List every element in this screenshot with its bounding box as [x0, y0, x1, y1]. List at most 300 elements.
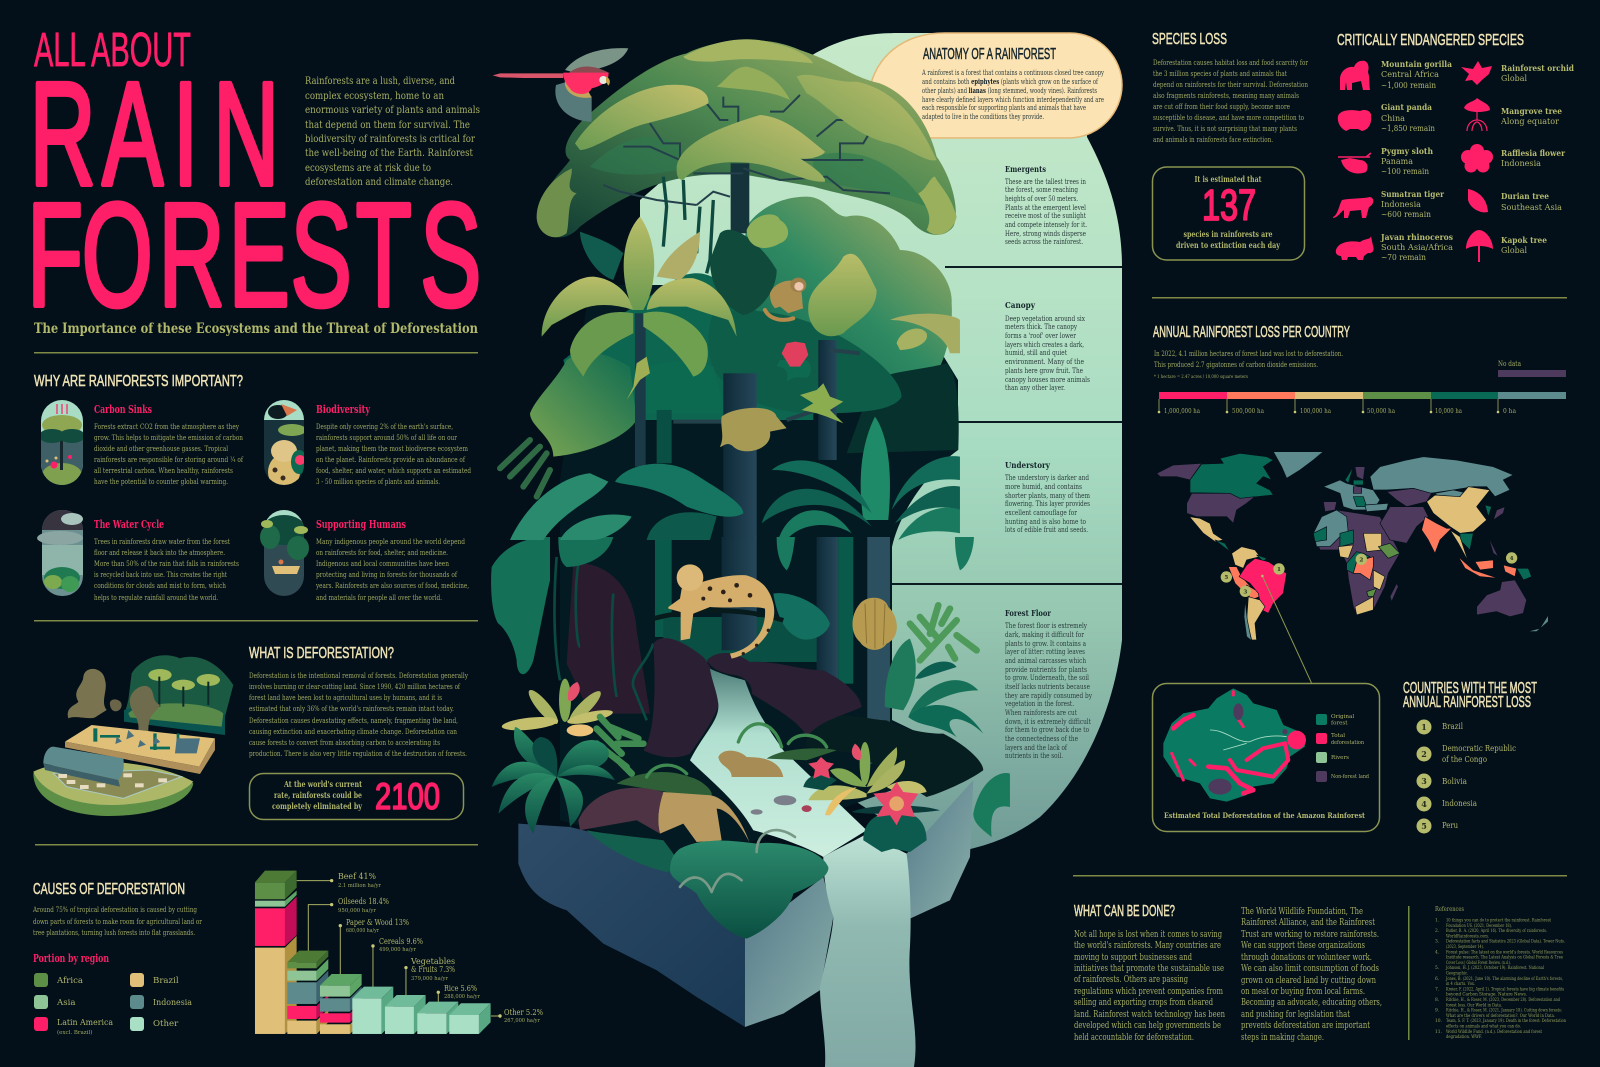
text column 1: regulations which prevent companies from: [1074, 986, 1223, 997]
bar: rice: [417, 1002, 458, 1034]
fern right of plant: [597, 717, 643, 774]
text: 3 - 50 million species of plants and animals.: [316, 477, 440, 486]
text: understory: Understory: [1005, 460, 1051, 470]
illustration: deforestation scene: [33, 655, 233, 816]
references: Johnson, H. J. (2023, October 19). Rainforest. National: [1445, 966, 1544, 971]
understory dark mass: [560, 285, 975, 860]
text: forest floor: When rainforests are cut: [1005, 708, 1077, 717]
small fern left: [500, 440, 550, 497]
text column 2: steps in making change.: [1241, 1032, 1324, 1043]
text: forest floor: to grow. Underneath, the soil: [1005, 673, 1090, 682]
references: 1.: [1435, 918, 1439, 924]
text: Many indigenous people around the world depend: [316, 537, 465, 546]
references: in 4 charts. Vox.: [1446, 982, 1475, 987]
front bush: [670, 840, 828, 939]
text column 2: The World Wildlife Foundation, The: [1241, 906, 1363, 917]
text: forest floor: and animal carcasses which: [1005, 656, 1086, 665]
plant right on rock: [885, 605, 1010, 837]
text column 2: on meat or buying from local farms.: [1241, 986, 1365, 997]
text: forest land have been lost to agricultural uses by humans, and it is: [249, 693, 442, 702]
text: forest floor: nutrients in the soil.: [1005, 751, 1063, 760]
text: rainforests support around 50% of all life on our: [316, 433, 457, 442]
text column 2: Trust are working to restore rainforests.: [1241, 929, 1379, 940]
text column 2: [1241, 906, 1382, 1043]
card: water cycle: [37, 510, 239, 602]
text: cause forests to convert from absorbing carbon to accelerating its: [249, 738, 440, 747]
text: [316, 422, 471, 486]
monkey: [765, 278, 806, 320]
legend: amazon: [1316, 714, 1369, 782]
text: understory: more humid, and contains: [1005, 482, 1082, 491]
text column 1: the world's rainforests. Many countries are: [1074, 940, 1221, 951]
panel: amazon deforestation map: [1152, 684, 1380, 832]
text: rainforests are responsible for storing around ¼ of: [94, 455, 244, 464]
text: [249, 671, 469, 758]
text: Around 75% of tropical deforestation is caused by cutting: [32, 905, 197, 914]
references: Butler, R. A. (2020, April 16). The diversity of rainforests.: [1446, 929, 1547, 934]
callout: anatomy of a rainforest: have clearly defined layers which function interdependently and are: [922, 95, 1104, 104]
legend: amazon: Rivers: [1331, 755, 1349, 761]
references: WorldRainforests.com.: [1446, 934, 1489, 939]
bar: oilseeds: [287, 951, 328, 1034]
references: Foundation US. (2021, December 18).: [1446, 924, 1512, 929]
text column 1: moving to support businesses and: [1074, 952, 1192, 963]
legend: portion by region: Brazil: [153, 976, 179, 986]
chart: world map: 5: [1224, 575, 1228, 581]
lower leaves: [510, 464, 743, 540]
chart: world map: 4: [1510, 556, 1514, 562]
text: planet, making them the most biodiverse ecosystem: [316, 444, 468, 453]
text: emergents: heights of over 50 meters.: [1005, 194, 1078, 203]
text: years. Rainforests are also sources of food, medicine,: [315, 581, 469, 590]
callout: anatomy of a rainforest: ANATOMY OF A RAINFOREST: [923, 46, 1056, 63]
text: emergents: Emergents: [1005, 164, 1046, 174]
intro paragraph: ecosystems are at risk due to: [305, 162, 431, 174]
title: The Water Cycle: [94, 518, 164, 531]
chart labels: 288,000 ha/yr: [444, 994, 480, 1000]
text column 2: We can also limit consumption of foods: [1241, 963, 1379, 974]
text: understory: flowering. This layer provides: [1005, 499, 1090, 508]
text column 2: through donations or volunteer work.: [1241, 952, 1372, 963]
text: [1153, 58, 1308, 144]
chart labels: Beef 41%: [338, 872, 376, 881]
icon: carbon sinks: [41, 400, 83, 485]
callout: 137 species: driven to extinction each day: [1176, 240, 1280, 250]
bush under anteater: [587, 830, 683, 872]
card: carbon sinks: [39, 400, 244, 487]
text: understory: hunting and is also home to: [1005, 517, 1086, 526]
text: and animals in rainforests face extinction.: [1153, 135, 1273, 144]
legend: amazon: deforestation: [1331, 740, 1364, 746]
references: References: [1435, 906, 1464, 913]
ranked list: [1416, 720, 1516, 834]
callout: 2100: At the world's current: [283, 779, 362, 789]
text: emergents: [1005, 164, 1087, 246]
text: grow. This helps to mitigate the emission of carbon: [94, 433, 243, 442]
canopy light caps: [537, 39, 957, 237]
text: forest floor: down, it is extremely difficult: [1005, 717, 1091, 726]
text: emergents: and compete intensely for it.: [1005, 220, 1087, 229]
text: [32, 905, 202, 937]
text: emergents: These are the tallest trees in: [1005, 177, 1086, 186]
section: countries with the most loss: [1403, 680, 1537, 834]
icon: mangrove tree: [1464, 98, 1490, 131]
chart labels: Vegetables: [410, 957, 455, 966]
text: mangrove tree: [1500, 107, 1562, 127]
text: gorilla: ~1,000 remain: [1381, 81, 1436, 91]
heading: SPECIES LOSS: [1152, 31, 1227, 48]
heading: WHY ARE RAINFORESTS IMPORTANT?: [34, 373, 243, 390]
text: dioxide and other greenhouse gasses. Tropical: [94, 444, 228, 453]
text: estimated that only 36% of the world's rainforests remain intact today.: [249, 704, 454, 713]
intro paragraph: complex ecosystem, home to an: [305, 90, 444, 102]
text: tiger: [1381, 190, 1444, 220]
references: degradation. WWF.: [1446, 1035, 1482, 1040]
text: sloth: Panama: [1381, 157, 1413, 167]
text: canopy: canopy houses more animals: [1005, 375, 1090, 384]
text: rhino: [1380, 233, 1453, 263]
text: canopy: Deep vegetation around six: [1005, 314, 1085, 323]
ranked list: Indonesia: [1442, 799, 1477, 809]
text column 1: held accountable for deforestation.: [1074, 1032, 1194, 1043]
title: [27, 24, 481, 337]
bottom trunks: [635, 313, 860, 540]
references: Institute research. The Latest Analysis on Global Forests & Tree: [1446, 956, 1563, 961]
text: rhino: ~70 remain: [1381, 253, 1426, 263]
upper section: trees: [493, 39, 960, 540]
references: 10.: [1435, 1019, 1442, 1024]
text: sloth: Pygmy sloth: [1381, 147, 1434, 157]
ranked list: Democratic Republic: [1442, 744, 1516, 754]
text: and materials for people all over the world.: [316, 593, 442, 602]
bar: cereals: [352, 987, 393, 1034]
waterfall: [820, 834, 916, 1067]
chart labels: Oilseeds 18.4%: [338, 897, 389, 906]
text: durian: Southeast Asia: [1501, 203, 1562, 213]
text: kapok: Kapok tree: [1501, 236, 1547, 246]
text column 1: land. Rainforest watch technology has been: [1074, 1009, 1225, 1020]
text: orchid: Rainforest orchid: [1501, 64, 1574, 74]
icon: kapok tree: [1466, 230, 1493, 262]
references: Ritchie, H., & Roser, M. (2023, December 28). Deforestation and: [1446, 998, 1560, 1003]
references: 7.: [1435, 987, 1439, 992]
ranked list: 3: [1421, 776, 1427, 786]
lower section: floor, rock, water: [491, 537, 1010, 1067]
text column 1: of rainforests. Others are passing: [1074, 974, 1188, 985]
text: Deforestation causes devastating effects, namely, fragmenting the land,: [249, 716, 458, 725]
text: panda: ~1,850 remain: [1381, 124, 1435, 134]
text: Deforestation is the intentional removal of forests. Deforestation generally: [249, 671, 469, 680]
title line: rain: RAIN: [30, 51, 279, 216]
text: More than 50% of the rain that falls in rainforests: [94, 559, 239, 568]
callout: 137 species: [1152, 167, 1304, 260]
text: on rainforests for food, shelter, and medicine.: [316, 548, 448, 557]
icon: rafflesia: [1461, 144, 1493, 172]
text column 2: prevents deforestation are important: [1241, 1020, 1370, 1031]
text: understory: [1005, 460, 1090, 534]
legend: no data: [1498, 359, 1566, 377]
rock block side: [907, 780, 973, 919]
text: depend on rainforests for their survival. Deforestation: [1153, 80, 1308, 89]
references: Deforestation facts and Statistics 2023 (Global Data). Tower Nuts.: [1446, 940, 1565, 945]
legend: portion by region: [33, 952, 192, 1036]
left palm: [542, 217, 737, 377]
intro paragraph: that depend on them for survival. The: [305, 119, 470, 131]
references: Forest pulse: The latest on the world's forests. World Resources: [1446, 950, 1564, 955]
text: forest floor: provide nutrients for plants: [1005, 665, 1087, 674]
text: canopy: than any other layer.: [1005, 383, 1065, 392]
snake: [720, 408, 787, 451]
text: protecting and living in forests for thousands of: [316, 570, 458, 579]
callout: anatomy of a rainforest: A rainforest is a forest that contains a continuous closed tree canopy: [921, 68, 1105, 77]
legend: colour scale: 0 ha: [1503, 407, 1516, 415]
text: forest floor: layers and the lack of: [1005, 743, 1068, 752]
legend: colour scale: 100,000 ha: [1300, 407, 1331, 415]
text: understory: shorter plants, many of them: [1005, 491, 1090, 500]
legend: amazon: forest: [1331, 720, 1348, 726]
icon: tiger: [1333, 197, 1373, 218]
bar: beef: [255, 871, 297, 1034]
parrot: [493, 48, 628, 122]
fern on bush: [680, 830, 795, 892]
text: production. There is also very little regulation of the destruction of forests.: [249, 749, 467, 758]
text: conditions for clouds and mist to form, which: [94, 581, 226, 590]
title line: forests: FORESTS: [27, 172, 481, 337]
main dark canopy: [537, 40, 956, 238]
text: forest floor: layer of litter: rotting leaves: [1005, 647, 1085, 656]
chart labels: [338, 872, 543, 1024]
chart labels: 950,000 ha/yr: [338, 908, 376, 914]
small bushes by stream: [617, 772, 712, 797]
references: Cover Loss | Global Forest Review. (n.d.).: [1446, 961, 1511, 966]
references: 4.: [1435, 950, 1439, 955]
text: durian: [1501, 192, 1562, 213]
text: forest floor: vegetation in the forest.: [1004, 699, 1074, 708]
callout: anatomy of a rainforest: adapted to live in the conditions they provide.: [922, 112, 1044, 121]
legend: colour scale: 10,000 ha: [1435, 407, 1462, 415]
text column 1: Not all hope is lost when it comes to saving: [1074, 929, 1222, 940]
text: emergents: seeds across the rainforest.: [1005, 237, 1083, 246]
bar: paper and wood: [320, 974, 362, 1034]
text: understory: The understory is darker and: [1005, 473, 1089, 482]
chart: world map: [1157, 452, 1548, 683]
text: canopy: humid, still and quiet: [1005, 348, 1067, 357]
ranked list: Bolivia: [1442, 777, 1467, 787]
heading: WHAT CAN BE DONE?: [1074, 903, 1175, 920]
callout: anatomy of a rainforest: other plants) and lianas (long stemmed, woody vines). Rainforests: [922, 86, 1097, 95]
title: Carbon Sinks: [94, 403, 152, 416]
cave rocks: [643, 638, 719, 757]
bar: other: [449, 1003, 491, 1034]
icon: orchid: [1461, 61, 1492, 85]
chart labels: Other 5.2%: [504, 1008, 543, 1017]
legend: colour scale: [1158, 392, 1566, 415]
references: beyond Carbon Storage. Nature News.: [1446, 993, 1527, 998]
text: panda: Giant panda: [1381, 103, 1432, 113]
text: Deforestation causes habitat loss and food scarcity for: [1153, 58, 1308, 67]
text: [1154, 349, 1343, 380]
chart labels: 379,000 ha/yr: [411, 976, 448, 982]
frog on trunk: [627, 357, 650, 400]
text: Trees in rainforests draw water from the forest: [94, 537, 230, 546]
subtitle: The Importance of these Ecosystems and the Threat of Deforestation: [34, 321, 478, 337]
rock block left face: [518, 824, 745, 1027]
title line: all about: ALL ABOUT: [34, 24, 191, 77]
callout: 137 species: 137: [1202, 181, 1256, 230]
big leaves top-left: [491, 537, 974, 674]
ranked list: 1: [1421, 722, 1427, 732]
chart labels: Paper & Wood 13%: [346, 918, 409, 927]
callout: 2100: 2100: [375, 776, 440, 817]
text: Indigenous and local communities have been: [316, 559, 449, 568]
text: the 3 million species of plants and animals that: [1153, 69, 1287, 78]
heading: WHAT IS DEFORESTATION?: [249, 645, 394, 662]
intro paragraph: Rainforests are a lush, diverse, and: [305, 75, 455, 87]
fish: [751, 795, 812, 815]
section: causes of deforestation: [32, 871, 543, 1036]
central dark blob: [710, 230, 777, 315]
section: critically endangered species: [1333, 32, 1574, 263]
text: rhino: South Asia/Africa: [1381, 243, 1453, 253]
text: forest floor: the connectedness of the: [1005, 734, 1078, 743]
legend: colour scale: 50,000 ha: [1367, 407, 1395, 415]
text: emergents: Plants at the emergent level: [1005, 203, 1087, 212]
flower plant right: [803, 742, 940, 852]
legend: portion by region: Portion by region: [33, 952, 109, 965]
panel: layer dividers: [863, 266, 1122, 585]
text: food, shelter, and water, which supports an estimated: [316, 466, 471, 475]
text: durian: Durian tree: [1501, 192, 1549, 202]
callout: 2100: completely eliminated by: [272, 801, 362, 811]
chart labels: & Fruits 7.3%: [411, 965, 455, 974]
text: helps to regulate rainfall around the world.: [94, 593, 218, 602]
text: rafflesia: [1501, 149, 1565, 169]
legend: portion by region: (excl. Brazil): [57, 1029, 92, 1036]
text: gorilla: [1381, 60, 1452, 91]
chart: stacked isometric bars: [255, 871, 491, 1034]
text column 1: initiatives that promote the sustainable use: [1074, 963, 1224, 974]
text: forest floor: The forest floor is extremely: [1005, 621, 1088, 630]
legend: colour scale: 1,000,000 ha: [1164, 407, 1200, 415]
references: effects on animals and what you can do.: [1446, 1024, 1521, 1030]
anteater: [578, 788, 749, 842]
text: forest floor: they are rapidly consumed by: [1005, 691, 1093, 700]
stream: [690, 669, 867, 857]
text: survive. Thus, it is not surprising that many plants: [1153, 124, 1297, 133]
dark ground right: [807, 715, 983, 797]
text: rhino: Javan rhinoceros: [1380, 233, 1453, 243]
text: canopy: plants here grow fruit. The: [1005, 366, 1083, 375]
text column 2: and pushing for legislation that: [1241, 1009, 1350, 1020]
legend: amazon: Non-forest land: [1331, 774, 1369, 780]
ranked list: Peru: [1442, 821, 1458, 831]
text: tree plantations, turning lush forests into flat grasslands.: [33, 928, 195, 937]
bromeliad: [800, 383, 843, 423]
capybara: [718, 751, 783, 777]
text: panda: [1381, 103, 1435, 134]
text: involves burning or clear-cutting land. Since 1990, 420 million hectares of: [249, 682, 461, 691]
icon: sloth: [1338, 153, 1371, 174]
bar: vegetables and fruits: [385, 995, 426, 1034]
text: mangrove tree: Mangrove tree: [1501, 107, 1562, 117]
text column 1: [1074, 929, 1225, 1043]
jungle plant upper left: [501, 679, 614, 746]
text: sloth: ~100 remain: [1381, 167, 1429, 177]
text: all terrestrial carbon. When healthy, rainforests: [94, 466, 233, 475]
text: gorilla: Mountain gorilla: [1381, 60, 1452, 70]
section: what can be done: [1074, 903, 1382, 1043]
text: tiger: Indonesia: [1381, 200, 1421, 210]
text: * 1 hectare = 2.47 acres / 10,000 square meters: [1154, 374, 1249, 380]
intro paragraph: enormous variety of plants and animals: [305, 104, 480, 116]
chart labels: 2.1 million ha/yr: [338, 883, 381, 889]
text: gorilla: Central Africa: [1381, 70, 1439, 80]
mid-left foliage: [530, 353, 637, 457]
legend: portion by region: Africa: [56, 976, 83, 986]
text: panda: China: [1381, 114, 1405, 124]
text: emergents: receive most of the sunlight: [1005, 211, 1086, 220]
text: [94, 422, 244, 486]
callout: 2100: rate, rainforests could be: [274, 790, 362, 800]
map: amazon: [1163, 688, 1306, 802]
callout: 137 species: It is estimated that: [1194, 174, 1262, 184]
text: is recycled back into use. This creates the right: [94, 570, 227, 579]
references: 2.: [1435, 929, 1439, 934]
tropical teal cluster: [492, 727, 615, 834]
legend: portion by region: Indonesia: [153, 998, 192, 1008]
references: 11.: [1435, 1030, 1442, 1035]
text: In 2022, 4.1 million hectares of forest land was lost to deforestation.: [1154, 349, 1343, 358]
text: canopy: layers which creates a dark,: [1005, 340, 1084, 349]
text: Forests extract CO2 from the atmosphere as they: [94, 422, 240, 431]
text: forest floor: itself lacks nutrients because: [1005, 682, 1090, 691]
banana palm: [762, 417, 960, 540]
text: [94, 537, 239, 602]
text: canopy: forms a 'roof' over lower: [1005, 331, 1076, 340]
legend: portion by region: Latin America: [57, 1018, 113, 1028]
card: biodiversity: [264, 400, 471, 490]
callout: 137 species: species in rainforests are: [1184, 229, 1272, 239]
ranked list: 5: [1421, 821, 1427, 831]
branches: [603, 95, 890, 205]
illustration: rainforest cross-section: [491, 39, 1010, 1067]
chart labels: 499,000 ha/yr: [379, 947, 416, 953]
canopy mid bands: [590, 137, 927, 207]
text: forest floor: [1004, 608, 1093, 760]
text: canopy: [1005, 300, 1090, 392]
text: canopy: Canopy: [1005, 300, 1036, 310]
chart labels: 267,000 ha/yr: [504, 1018, 540, 1024]
forest floor background: [554, 537, 890, 764]
text: sloth: [1381, 147, 1434, 177]
second tree canopy: [725, 197, 952, 389]
section: why are rainforests important: [34, 373, 471, 602]
text: tiger: ~600 remain: [1381, 210, 1431, 220]
icon: gorilla: [1340, 61, 1370, 90]
ranked list: 2: [1421, 749, 1427, 759]
callout: 2100: [250, 774, 464, 820]
chart: world map: 1: [1277, 567, 1281, 573]
text: forest floor: Forest Floor: [1005, 608, 1051, 618]
references: Ritchie, H., & Roser, M. (2021, January 18). Cutting down forests:: [1446, 1009, 1562, 1014]
intro paragraph: deforestation and climate change.: [305, 176, 453, 188]
references: (2023, September 14).: [1446, 945, 1484, 950]
icon: panda: [1338, 110, 1371, 131]
text: understory: lots of edible fruit and seeds.: [1005, 525, 1088, 534]
text: rafflesia: Rafflesia flower: [1501, 149, 1565, 159]
references: World Wildlife Fund. (n.d.). Deforestation and forest: [1446, 1030, 1542, 1035]
lower central foliage: [708, 310, 902, 413]
